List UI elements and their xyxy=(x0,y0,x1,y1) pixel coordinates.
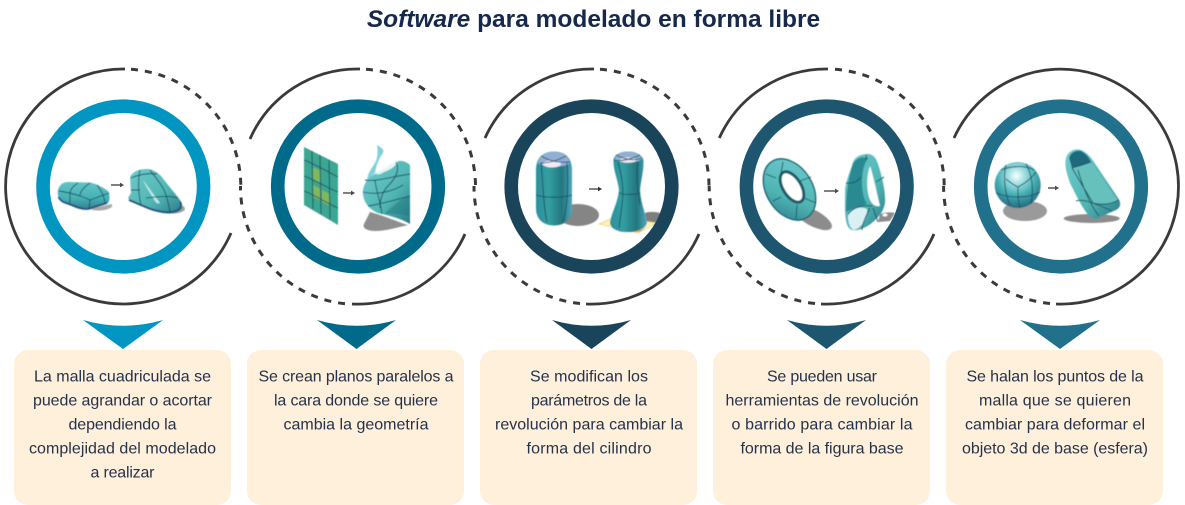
card text: herramientas de revolución xyxy=(726,392,918,410)
outer solid arc, bottom right xyxy=(352,234,465,304)
outer solid arc xyxy=(6,69,231,304)
card text xyxy=(258,368,454,434)
card text xyxy=(29,368,216,482)
pointer xyxy=(83,320,163,349)
outer dashed arc, top right xyxy=(600,69,709,186)
card xyxy=(14,350,231,505)
card text xyxy=(726,368,918,458)
card text: Se pueden usar xyxy=(767,368,878,386)
card text: forma de la figura base xyxy=(740,440,904,458)
card text: puede agrandar o acortar xyxy=(33,392,213,410)
illustration: cylinder to hourglass xyxy=(536,152,664,233)
card text: malla que se quieren xyxy=(979,392,1131,410)
ring xyxy=(981,106,1141,267)
card text: dependiendo la xyxy=(68,416,177,434)
illustration: block to wedge xyxy=(58,169,185,214)
arrow xyxy=(343,191,355,195)
card xyxy=(480,350,697,505)
card text: la cara donde se quiere xyxy=(274,392,438,410)
panel: step 4 xyxy=(709,69,944,505)
card xyxy=(946,350,1163,505)
arrow xyxy=(824,189,839,193)
card text: a realizar xyxy=(90,464,155,482)
outer dashed arc, bottom left xyxy=(240,186,345,304)
card text: parámetros de la xyxy=(531,392,647,410)
outer solid arc, top left xyxy=(719,69,828,138)
outer dashed arc, bottom left xyxy=(709,186,815,304)
panel: step 2 xyxy=(240,69,476,505)
outer solid arc, top left xyxy=(250,69,360,139)
outer dashed arc xyxy=(944,186,1050,304)
card xyxy=(247,350,464,505)
card text: cambiar para deformar el xyxy=(965,416,1145,434)
card xyxy=(713,350,930,505)
ring xyxy=(278,106,438,267)
pointer xyxy=(552,320,631,349)
panel: step 3 xyxy=(474,69,709,505)
card text: Se crean planos paralelos a xyxy=(258,368,454,386)
outer dashed arc, top right xyxy=(835,69,944,186)
outer dashed arc, top right xyxy=(366,69,476,186)
arrow xyxy=(589,187,602,191)
card text: objeto 3d de base (esfera) xyxy=(962,440,1148,458)
pointer xyxy=(1020,320,1100,349)
outer dashed arc xyxy=(131,69,241,186)
card text: forma del cilindro xyxy=(526,440,652,458)
arrow xyxy=(1048,186,1059,190)
ring xyxy=(43,106,204,267)
pointer xyxy=(317,320,396,349)
panel: step 1 xyxy=(6,69,241,505)
outer solid arc, top left xyxy=(485,69,594,138)
card text: cambia la geometría xyxy=(284,416,429,434)
ring xyxy=(511,106,672,267)
card text: La malla cuadriculada se xyxy=(34,368,211,386)
arrow xyxy=(111,183,124,187)
card text: complejidad del modelado xyxy=(29,440,216,458)
ring xyxy=(746,106,907,267)
title: Software para modelado en forma libre xyxy=(367,6,820,33)
card text: Se modifican los xyxy=(530,368,648,386)
illustration: torus to loop xyxy=(753,149,895,235)
outer solid arc, bottom right xyxy=(586,234,699,304)
card text: o barrido para cambiar la xyxy=(732,416,913,434)
pointer xyxy=(787,320,866,349)
illustration: plane to surface xyxy=(304,145,410,231)
outer solid arc xyxy=(954,69,1178,304)
card text: Se halan los puntos de la xyxy=(966,368,1144,386)
card text xyxy=(962,368,1148,458)
panel: step 5 xyxy=(944,69,1178,505)
outer dashed arc, bottom left xyxy=(474,186,580,304)
illustration: sphere to deformed shape xyxy=(995,149,1120,223)
card text xyxy=(495,368,683,458)
card text: revolución para cambiar la xyxy=(495,416,683,434)
outer solid arc, bottom right xyxy=(821,234,934,304)
